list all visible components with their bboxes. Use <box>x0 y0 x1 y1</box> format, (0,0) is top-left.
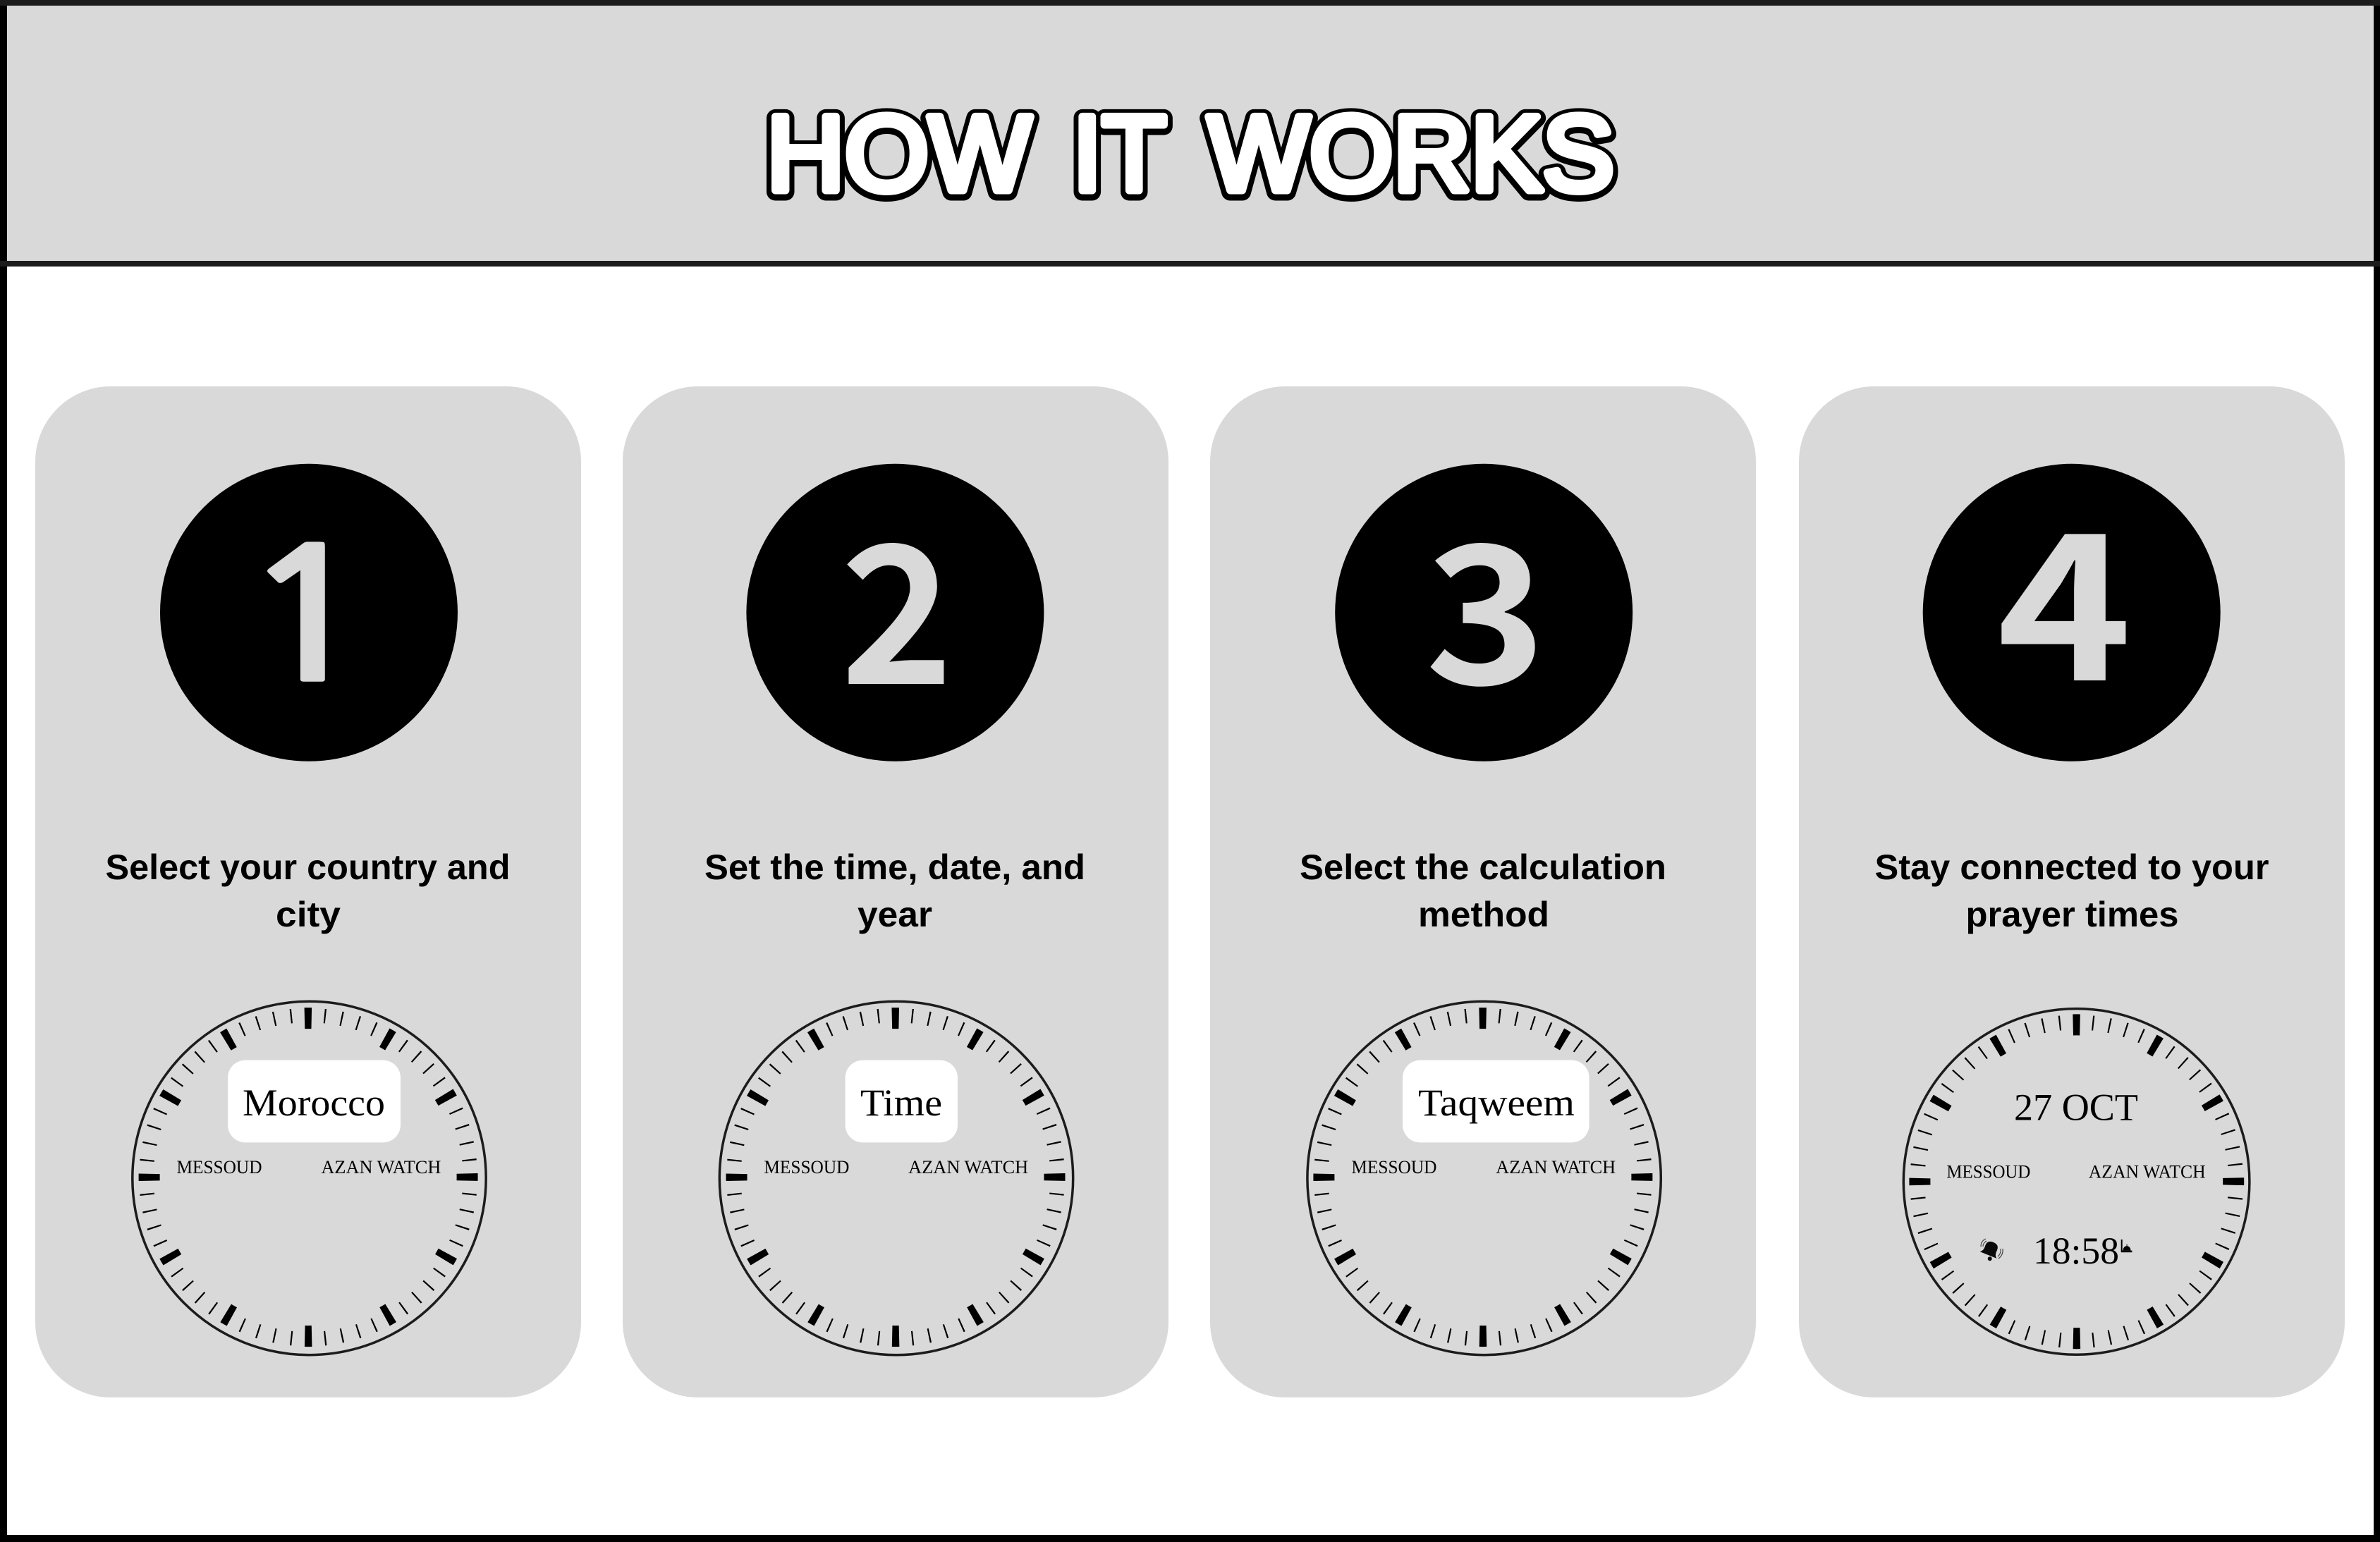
number badge 4 <box>1923 445 2221 761</box>
panel: step 3 <box>1210 386 1756 1397</box>
method pill <box>1403 1060 1589 1142</box>
panel: step 2 <box>623 386 1168 1397</box>
watch labels: MESSOUD <box>176 1157 262 1177</box>
title: IT <box>1073 95 1166 215</box>
step 1 text <box>106 848 511 934</box>
time pill <box>846 1060 958 1142</box>
watch labels: AZAN WATCH <box>1496 1157 1616 1177</box>
watch labels <box>1351 1157 1616 1177</box>
watch labels: MESSOUD <box>764 1157 849 1177</box>
number badge 4: 4 <box>1997 445 2132 739</box>
title <box>767 94 1614 215</box>
number badge 2 <box>746 462 1044 761</box>
prayer time: 18:58 <box>2033 1230 2119 1272</box>
country pill: Morocco <box>243 1082 385 1124</box>
title: IT <box>1073 94 1166 214</box>
watch face: Time <box>719 1001 1073 1355</box>
title: WORKS <box>1208 95 1614 215</box>
method pill: Taqweem <box>1418 1082 1575 1124</box>
watch labels: MESSOUD <box>1351 1157 1436 1177</box>
step 2 text <box>704 848 1085 934</box>
icon: mosque <box>2121 1240 2132 1252</box>
step 4 text: prayer times <box>1966 895 2179 934</box>
panel: step 1 <box>35 386 581 1397</box>
watch labels <box>764 1157 1028 1177</box>
country pill <box>228 1060 401 1142</box>
step 3 text <box>1300 848 1666 934</box>
watch labels: AZAN WATCH <box>908 1157 1028 1177</box>
watch face: Morocco <box>133 1001 486 1355</box>
panel: step 4 <box>1799 386 2345 1397</box>
watch labels <box>176 1157 441 1177</box>
step 2 text: year <box>858 895 932 934</box>
step 4 text: Stay connected to your <box>1874 848 2269 887</box>
watch face: date and prayer time <box>1903 1009 2250 1354</box>
step 3 text: Select the calculation <box>1300 848 1666 887</box>
date: 27 OCT <box>2014 1087 2138 1129</box>
number badge 2: 2 <box>841 462 953 740</box>
step 3 text: method <box>1418 895 1549 934</box>
number badge 1: 1 <box>238 527 377 709</box>
title: WORKS <box>1208 94 1614 214</box>
step 1 text: Select your country and <box>106 848 511 887</box>
step 2 text: Set the time, date, and <box>704 848 1085 887</box>
icon: ringing bell <box>1978 1239 2003 1263</box>
number badge 1 <box>160 464 458 761</box>
title: HOW <box>767 94 1031 214</box>
watch labels: AZAN WATCH <box>2089 1161 2206 1182</box>
watch labels <box>1946 1161 2206 1182</box>
watch labels: MESSOUD <box>1946 1161 2030 1182</box>
time pill: Time <box>860 1082 942 1124</box>
number badge 3: 3 <box>1425 462 1546 740</box>
step 1 text: city <box>276 895 341 934</box>
number badge 3 <box>1335 462 1633 761</box>
watch labels: AZAN WATCH <box>321 1157 441 1177</box>
header band <box>0 0 2380 267</box>
step 4 text <box>1874 848 2269 934</box>
title: HOW <box>767 95 1031 215</box>
watch face: Taqweem <box>1307 1001 1661 1355</box>
